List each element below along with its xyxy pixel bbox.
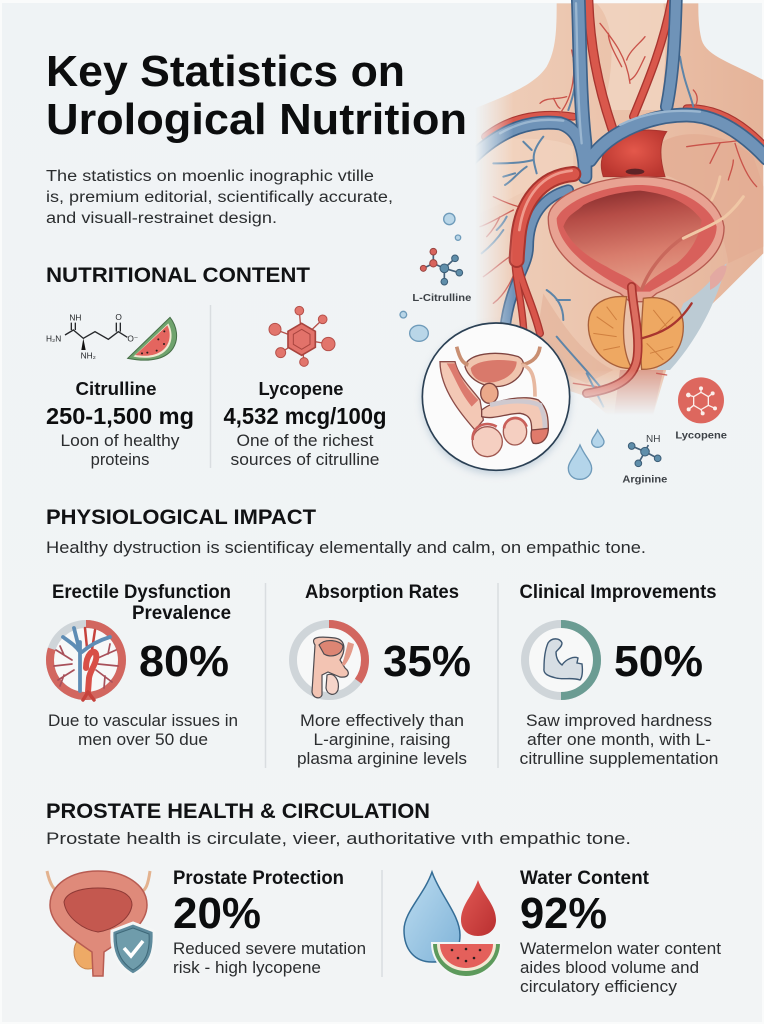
- intro text: and visuall-restrainet design.: [46, 210, 277, 227]
- prostate description: [173, 939, 366, 977]
- absorption description: More effectively than: [300, 711, 464, 730]
- descending artery: [515, 171, 573, 333]
- thin branches: [480, 23, 757, 387]
- erectile description: men over 50 due: [78, 730, 208, 749]
- heading: physiological impact: PHYSIOLOGICAL IMPACT: [46, 506, 316, 529]
- ring: 50 percent: [525, 624, 597, 696]
- lycopene description: sources of citrulline: [230, 451, 380, 469]
- ring: 35 percent: [293, 624, 365, 698]
- panel: water content: [404, 868, 721, 996]
- icon: lycopene molecule: [269, 306, 335, 366]
- panel: erectile dysfunction: [48, 582, 238, 749]
- prostate heading: Prostate Protection: [173, 868, 344, 889]
- molecule label: Arginine: [622, 434, 668, 486]
- icon: citrulline structure: H₂N: [46, 333, 61, 343]
- icon: water, blood and watermelon: [404, 872, 501, 977]
- clinical description: after one month, with L-: [527, 730, 711, 749]
- clinical description: [520, 711, 718, 768]
- icon: citrulline structure: NH₂: [81, 350, 96, 360]
- physiological intro: Healthy dystruction is scientificay elementally and calm, on empathic tone.: [46, 539, 646, 557]
- citrulline description: Loon of healthy: [60, 432, 180, 450]
- molecule label: Lycopene: Lycopene: [675, 430, 727, 441]
- value: 35%: 35%: [383, 637, 471, 686]
- citrulline name: Citrulline: [76, 379, 156, 399]
- panel: prostate protection: [47, 868, 366, 977]
- panel: citrulline: [46, 312, 194, 469]
- icon: citrulline structure: [46, 312, 138, 360]
- panel: absorption rates: [293, 582, 471, 768]
- prostate lobes: [588, 296, 632, 368]
- aortic arch: [601, 130, 667, 177]
- veins: [470, 0, 764, 328]
- anatomical illustration: [467, 0, 764, 420]
- intro text: The statistics on moenlic inographic vtille: [46, 168, 374, 185]
- icon: watermelon slice: [128, 317, 177, 360]
- absorption description: [297, 711, 467, 768]
- erectile heading: [52, 582, 231, 624]
- value: 80%: 80%: [139, 637, 229, 686]
- citrulline value: 250-1,500 mg: [46, 403, 194, 429]
- clinical heading: Clinical Improvements: [520, 582, 716, 603]
- water description: [520, 939, 721, 996]
- value: 20%: 20%: [173, 889, 261, 938]
- heading: nutritional content: NUTRITIONAL CONTENT: [46, 264, 310, 287]
- title: Urological Nutrition: [46, 95, 467, 144]
- lycopene description: [230, 432, 380, 469]
- water droplets: [400, 213, 604, 479]
- lycopene value: 4,532 mcg/100g: [224, 403, 386, 429]
- clinical description: citrulline supplementation: [520, 749, 718, 768]
- lycopene name: Lycopene: [258, 379, 344, 399]
- molecule label: Arginine: Arginine: [622, 475, 668, 486]
- citrulline description: proteins: [91, 451, 149, 469]
- erectile description: Due to vascular issues in: [48, 711, 238, 730]
- molecule label: Arginine: NH: [646, 434, 660, 445]
- bladder wall: [548, 177, 724, 302]
- water description: circulatory efficiency: [520, 977, 678, 996]
- erectile heading: Erectile Dysfunction: [52, 582, 231, 603]
- molecule label: L-Citrulline: L-Citrulline: [412, 293, 472, 304]
- panel: lycopene: [224, 306, 386, 469]
- absorption heading: Absorption Rates: [305, 582, 459, 603]
- citrulline description: [60, 432, 180, 469]
- title: [46, 47, 467, 144]
- heading: prostate health and circulation: PROSTATE HEALTH & CIRCULATION: [46, 800, 430, 823]
- intro text: is, premium editorial, scientifically accurate,: [46, 189, 393, 206]
- prostate description: Reduced severe mutation: [173, 939, 366, 958]
- value: 92%: 92%: [520, 889, 607, 938]
- inset circle: male anatomy: [422, 323, 570, 474]
- absorption description: L-arginine, raising: [314, 730, 450, 749]
- molecule label: Lycopene: [675, 377, 727, 441]
- icon: vascular tree: [54, 628, 118, 700]
- icon: citrulline structure: O: [115, 312, 122, 322]
- urethra: [587, 287, 692, 393]
- erectile description: [48, 711, 238, 749]
- icon: prostate with shield: [47, 871, 154, 976]
- panel: clinical improvements: [520, 582, 718, 768]
- arteries upper: [485, 0, 764, 148]
- icon: citrulline structure: NH: [69, 313, 81, 323]
- icon: citrulline structure: O⁻: [127, 333, 138, 343]
- intro text: [46, 168, 393, 227]
- molecule label: L-Citrulline: [412, 248, 472, 304]
- lycopene description: One of the richest: [236, 432, 374, 450]
- icon: flexed arm: [544, 639, 582, 680]
- absorption description: plasma arginine levels: [297, 749, 467, 768]
- title: Key Statistics on: [46, 47, 405, 96]
- value: 50%: 50%: [614, 637, 703, 686]
- water description: aides blood volume and: [520, 958, 699, 977]
- icon: male anatomy: [312, 637, 354, 698]
- prostate description: risk - high lycopene: [173, 958, 321, 977]
- clinical description: Saw improved hardness: [526, 711, 712, 730]
- ring: 80 percent: [50, 624, 122, 700]
- erectile heading: Prevalence: [132, 603, 231, 624]
- water heading: Water Content: [520, 868, 650, 889]
- prostate intro: Prostate health is circulate, vieer, authoritative vıth empathic tone.: [46, 830, 631, 848]
- water description: Watermelon water content: [520, 939, 721, 958]
